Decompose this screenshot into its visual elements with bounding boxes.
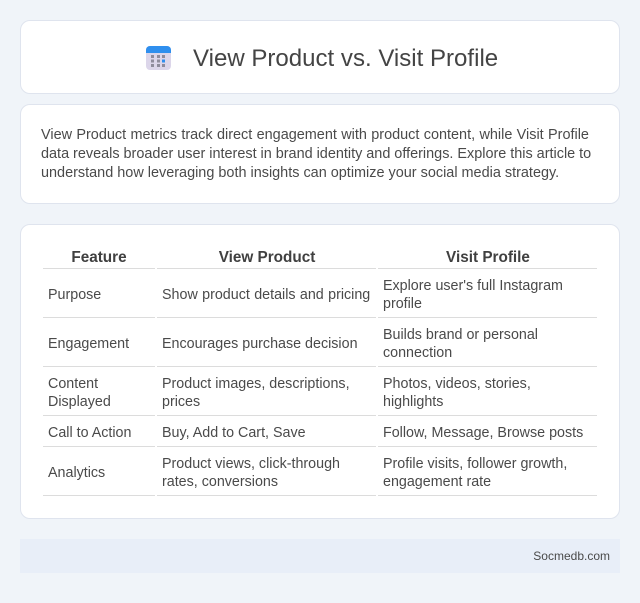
row: content displayed: Photos, videos, stories,	[383, 376, 531, 392]
row: content displayed: Content	[48, 376, 98, 392]
title: View Product vs. Visit Profile	[193, 45, 498, 72]
row: content displayed: highlights	[383, 394, 443, 410]
row: purpose: Purpose	[48, 287, 101, 303]
intro paragraph: data reveals broader user interest in brand identity and offerings. Explore this article to	[41, 146, 591, 162]
table header	[71, 249, 530, 266]
panel: comparison table	[20, 224, 620, 519]
row: content displayed: prices	[162, 394, 200, 410]
row: engagement: Builds brand or personal	[383, 327, 538, 343]
row: analytics: engagement rate	[383, 474, 491, 490]
row: analytics: Analytics	[48, 465, 105, 481]
row: analytics: Profile visits, follower growth,	[383, 456, 567, 472]
row: engagement: Encourages purchase decision	[162, 336, 358, 352]
row: content displayed: Product images, descriptions,	[162, 376, 350, 392]
row: content displayed: Displayed	[48, 394, 111, 410]
intro paragraph	[41, 127, 591, 181]
row: purpose: Explore user's full Instagram	[383, 278, 563, 294]
row: call to action: Buy, Add to Cart, Save	[162, 425, 306, 441]
row: purpose	[48, 278, 563, 312]
table header: View Product	[219, 249, 315, 266]
icon: calendar	[146, 46, 171, 70]
intro paragraph: View Product metrics track direct engagement with product content, while Visit Profile	[41, 127, 589, 143]
row: call to action: Follow, Message, Browse posts	[383, 425, 583, 441]
row: analytics: rates, conversions	[162, 474, 278, 490]
row: call to action: Call to Action	[48, 425, 131, 441]
footer bar	[20, 539, 620, 573]
row: call to action	[48, 425, 583, 441]
row: content displayed	[48, 376, 531, 410]
row: purpose: profile	[383, 296, 422, 312]
intro paragraph: understand how leveraging both insights can optimize your social media strategy.	[41, 165, 559, 181]
footer source text: Socmedb.com	[533, 549, 610, 563]
row: analytics: Product views, click-through	[162, 456, 340, 472]
row: purpose: Show product details and pricing	[162, 287, 370, 303]
row: engagement: connection	[383, 345, 452, 361]
row: analytics	[48, 456, 567, 490]
panel: intro text	[20, 104, 620, 204]
row: engagement	[48, 327, 538, 361]
table header: Feature	[71, 249, 127, 266]
panel: title card	[20, 20, 620, 94]
table header: Visit Profile	[446, 249, 530, 266]
row: engagement: Engagement	[48, 336, 129, 352]
